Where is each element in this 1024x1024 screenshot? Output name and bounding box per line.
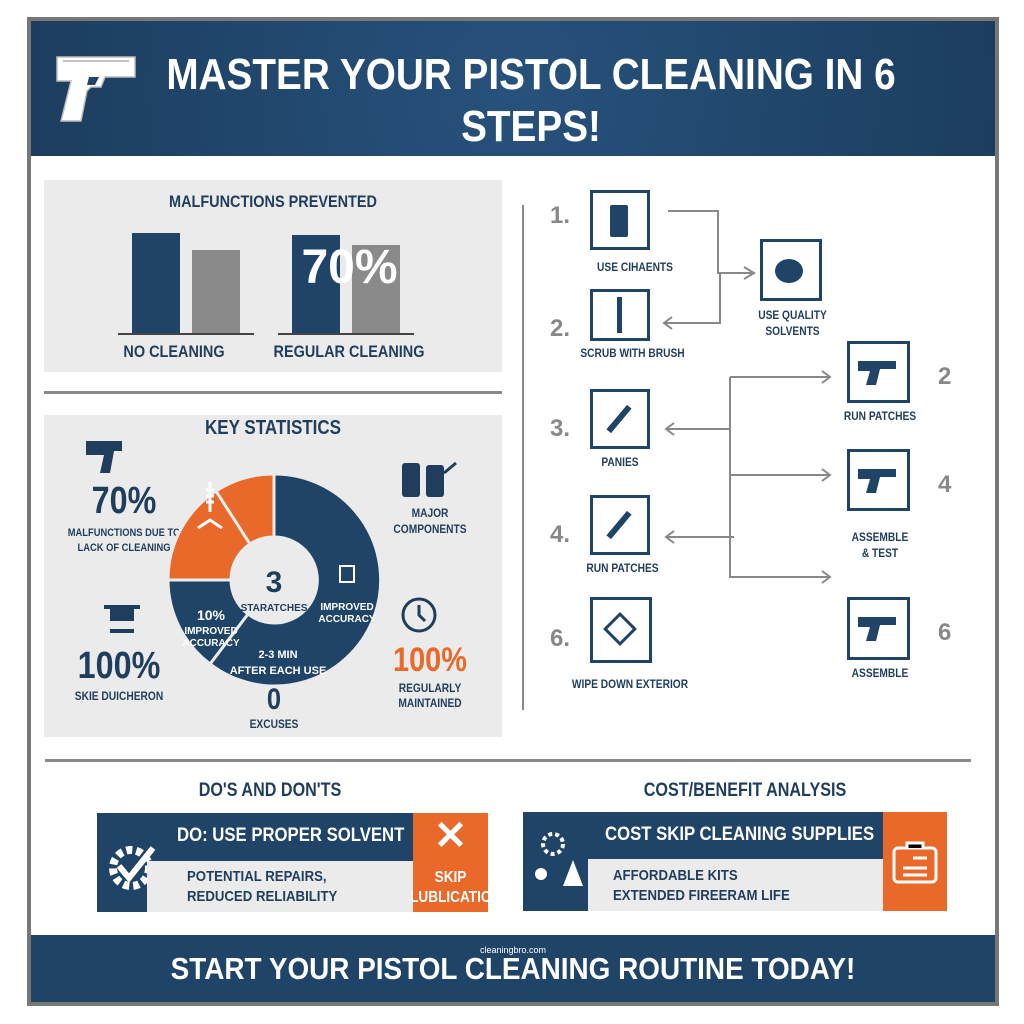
footer banner: cleaningbro.com bbox=[480, 945, 546, 955]
title: STEPS! bbox=[461, 102, 601, 151]
right step 6: 6 bbox=[938, 619, 951, 646]
step 1 bbox=[550, 190, 673, 274]
bar chart bbox=[118, 233, 414, 335]
step 1: USE CIHAENTS bbox=[597, 260, 673, 274]
step 6: WIPE DOWN EXTERIOR bbox=[572, 677, 688, 691]
icon: tool bbox=[104, 605, 140, 633]
right step 4: & TEST bbox=[862, 546, 898, 560]
heading: do's and don'ts: DO'S AND DON'TS bbox=[199, 780, 341, 801]
panel: malfunctions chart bbox=[44, 180, 502, 372]
right step 6: ASSEMBLE bbox=[852, 666, 908, 680]
panel: key statistics: MAINTAINED bbox=[398, 696, 462, 710]
donut chart: IMPROVED bbox=[184, 626, 238, 637]
panel: key statistics: 100% bbox=[78, 645, 160, 687]
icon: gun bbox=[86, 441, 122, 473]
panel: cost: EXTENDED FIREERAM LIFE bbox=[613, 887, 790, 904]
bar chart: 70% bbox=[301, 241, 398, 294]
panel: do's: LUBLICATION bbox=[410, 889, 501, 906]
footer banner bbox=[31, 935, 995, 1002]
step 2: 2. bbox=[550, 315, 570, 342]
title: MASTER YOUR PISTOL CLEANING IN 6 bbox=[166, 50, 896, 99]
panel: do's: SKIP bbox=[435, 869, 466, 886]
panel: malfunctions chart: NO CLEANING bbox=[123, 342, 225, 361]
step 2 bbox=[550, 289, 685, 360]
step: quality solvents bbox=[758, 239, 827, 338]
panel: key statistics: LACK OF CLEANING bbox=[78, 542, 170, 554]
donut chart: IMPROVED bbox=[320, 602, 374, 613]
step 4: 4. bbox=[550, 521, 570, 548]
panel: cost bbox=[523, 812, 947, 911]
panel: key statistics: COMPONENTS bbox=[393, 522, 467, 536]
step 1: 1. bbox=[550, 202, 570, 229]
panel: do's: POTENTIAL REPAIRS, bbox=[187, 868, 327, 885]
panel: key statistics bbox=[44, 415, 502, 737]
icon: bottles bbox=[402, 462, 457, 497]
panel: key statistics: 70% bbox=[92, 480, 156, 522]
icon: clock bbox=[402, 598, 436, 632]
step 3: PANIES bbox=[601, 455, 639, 469]
heading: cost/benefit: COST/BENEFIT ANALYSIS bbox=[644, 780, 846, 801]
donut chart: STARATCHES bbox=[241, 603, 308, 614]
panel: do's: ✕ bbox=[434, 814, 467, 858]
header bbox=[31, 21, 995, 156]
right step 6 bbox=[847, 597, 951, 680]
stat 100% maintained bbox=[393, 641, 467, 710]
panel: key statistics: REGULARLY bbox=[399, 681, 461, 695]
stat 100% bbox=[75, 645, 163, 703]
step 4 bbox=[550, 495, 659, 575]
step 3 bbox=[550, 389, 650, 469]
donut chart: 10% bbox=[197, 607, 226, 623]
panel: do's: REDUCED RELIABILITY bbox=[187, 888, 337, 905]
right step 2: RUN PATCHES bbox=[844, 409, 916, 423]
step 4: RUN PATCHES bbox=[586, 561, 659, 575]
panel: key statistics: 0 bbox=[267, 683, 281, 716]
icon: pistol bbox=[56, 56, 136, 122]
panel: do's: DO: USE PROPER SOLVENT bbox=[177, 825, 404, 846]
step 3: 3. bbox=[550, 415, 570, 442]
right step 2 bbox=[844, 341, 951, 423]
donut chart: ACCURACY bbox=[318, 614, 376, 625]
donut chart: AFTER EACH USE bbox=[230, 665, 326, 677]
footer banner: START YOUR PISTOL CLEANING ROUTINE TODAY! bbox=[171, 951, 855, 986]
panel: key statistics: EXCUSES bbox=[250, 717, 298, 731]
step 6 bbox=[550, 597, 688, 691]
panel: malfunctions chart: REGULAR CLEANING bbox=[274, 342, 424, 361]
panel: key statistics: MALFUNCTIONS DUE TO bbox=[68, 527, 180, 539]
heading: MALFUNCTIONS PREVENTED bbox=[169, 192, 377, 211]
step: quality solvents: USE QUALITY bbox=[758, 308, 827, 322]
donut chart: 3 bbox=[266, 566, 282, 599]
title bbox=[166, 50, 896, 151]
panel: key statistics: 100% bbox=[393, 641, 467, 679]
right step 4: 4 bbox=[938, 471, 951, 498]
donut chart: ACCURACY bbox=[182, 638, 240, 649]
panel: cost: COST SKIP CLEANING SUPPLIES bbox=[605, 824, 874, 845]
right step 4 bbox=[847, 449, 952, 560]
donut chart bbox=[170, 476, 380, 684]
panel: key statistics: SKIE DUICHERON bbox=[75, 689, 163, 703]
donut chart: 2-3 MIN bbox=[258, 649, 298, 661]
panel: cost: AFFORDABLE KITS bbox=[613, 867, 738, 884]
panel: do's bbox=[97, 813, 488, 912]
panel: key statistics: KEY STATISTICS bbox=[205, 417, 341, 439]
stat 70% bbox=[68, 480, 180, 554]
panel: steps flow bbox=[550, 190, 952, 691]
panel: key statistics: MAJOR bbox=[412, 506, 448, 520]
step: quality solvents: SOLVENTS bbox=[765, 324, 820, 338]
step 2: SCRUB WITH BRUSH bbox=[580, 346, 685, 360]
step 6: 6. bbox=[550, 625, 570, 652]
right step 2: 2 bbox=[938, 363, 951, 390]
stat 0 excuses bbox=[250, 683, 298, 731]
right step 4: ASSEMBLE bbox=[852, 530, 908, 544]
